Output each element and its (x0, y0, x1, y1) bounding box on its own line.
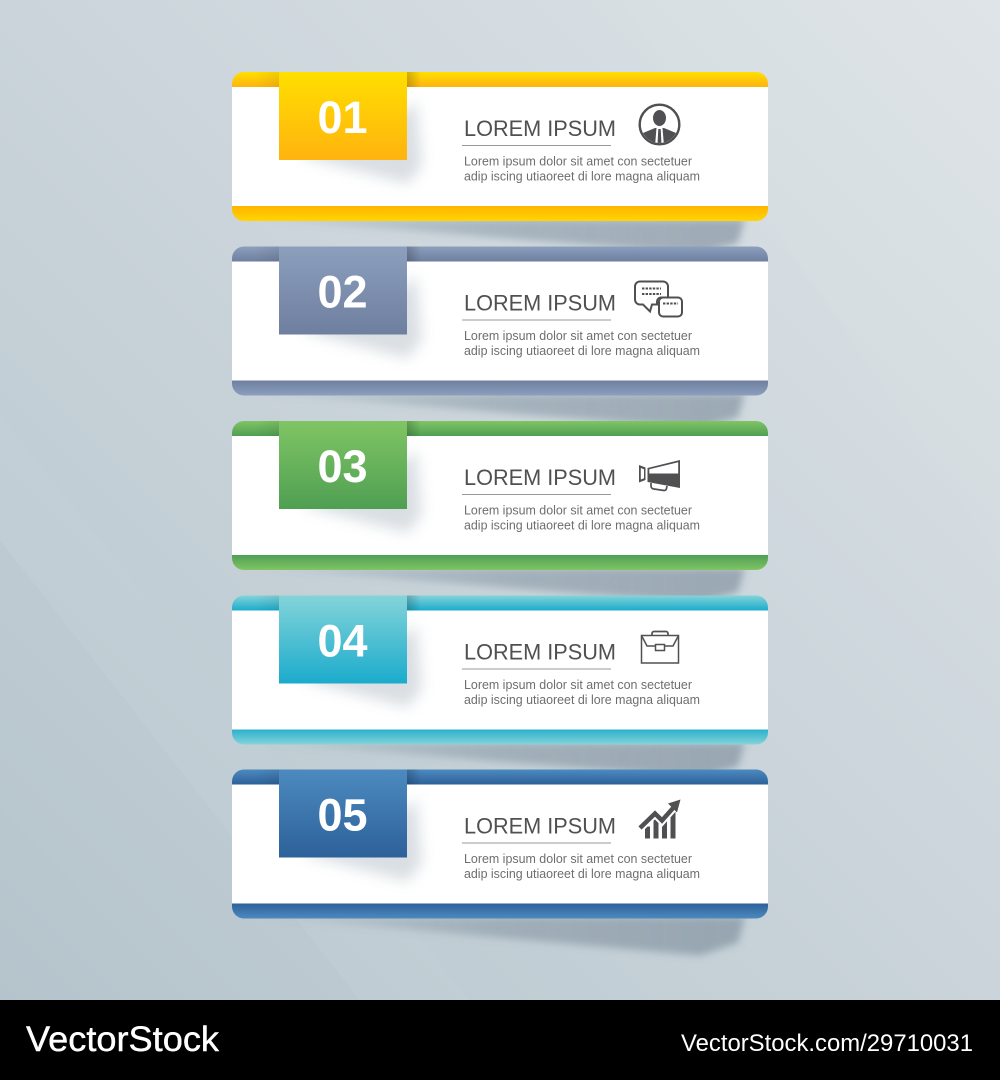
card 5 title: LOREM IPSUM (464, 814, 616, 838)
card 5 rule (462, 842, 611, 844)
card 4 top band (232, 596, 768, 610)
card 4 number tab (279, 596, 407, 684)
card 4 number: 04 (317, 616, 368, 666)
card 1 rule (462, 145, 611, 146)
card 4 body text (464, 678, 700, 707)
card 1 (232, 72, 768, 254)
card 2 body text: adip iscing utiaoreet di lore magna aliquam (464, 344, 700, 358)
card 3 top band (232, 421, 768, 436)
card 5 body text: adip iscing utiaoreet di lore magna aliquam (464, 867, 700, 881)
card 4 bottom band (232, 730, 768, 744)
card 2 number tab (279, 246, 407, 334)
footer url: VectorStock.com/29710031 (681, 1030, 973, 1057)
card 4 rule (462, 668, 611, 670)
card 1 top band (232, 72, 768, 87)
card 1 title: LOREM IPSUM (464, 116, 616, 141)
card 3 rule (462, 494, 611, 495)
card 5 drop shadow (262, 916, 745, 956)
icon: megaphone (639, 460, 680, 491)
card 2 bottom band (232, 380, 768, 396)
card 3 body text: adip iscing utiaoreet di lore magna aliquam (464, 518, 700, 532)
card 3 body text (464, 504, 700, 532)
card 3 title: LOREM IPSUM (464, 465, 616, 490)
icon: rising bar chart with arrow (640, 800, 680, 838)
card 2 top band (232, 246, 768, 262)
card 2 tab shadow (300, 274, 422, 358)
card 4 tab shadow (300, 624, 422, 708)
card 1 bottom band (232, 206, 768, 221)
card 5 number: 05 (317, 790, 368, 840)
card 3 white body (232, 436, 768, 555)
card 2 tab fold shade (255, 246, 421, 262)
card 2 drop shadow (262, 394, 745, 428)
card 5 tab fold shade (255, 770, 421, 784)
card 5 white body (232, 784, 768, 904)
card 3 (232, 421, 768, 603)
card 1 tab shadow (300, 100, 422, 184)
card 1 tab fold shade (255, 72, 421, 87)
card 1 white body (232, 87, 768, 206)
card 1 body text: adip iscing utiaoreet di lore magna aliquam (464, 170, 700, 184)
card 3 tab shadow (300, 449, 422, 533)
card 4 white body (232, 610, 768, 730)
footer bar (0, 1000, 1000, 1080)
card 1 number: 01 (317, 92, 368, 143)
card 2 white body (232, 262, 768, 380)
card 3 drop shadow (262, 568, 745, 603)
card 5 tab shadow (300, 798, 422, 882)
card 5 (232, 770, 768, 956)
card 4 title: LOREM IPSUM (464, 640, 616, 664)
footer logo: VectorStock (26, 1020, 220, 1059)
card 4 body text: adip iscing utiaoreet di lore magna aliquam (464, 693, 700, 707)
card 4 tab fold shade (255, 596, 421, 610)
card 2 body text: Lorem ipsum dolor sit amet con sectetuer (464, 329, 692, 343)
card 1 body text (464, 154, 700, 184)
card 4 (232, 596, 768, 778)
card 5 bottom band (232, 904, 768, 918)
icon: briefcase (642, 632, 678, 663)
card 1 body text: Lorem ipsum dolor sit amet con sectetuer (464, 154, 692, 168)
icon: speech bubbles (635, 282, 682, 316)
card 5 number tab (279, 770, 407, 858)
card 2 number: 02 (317, 266, 368, 318)
card 5 body text: Lorem ipsum dolor sit amet con sectetuer (464, 852, 692, 866)
card 5 body text (464, 852, 700, 881)
card 3 number: 03 (317, 441, 368, 492)
card 2 body text (464, 329, 700, 358)
card 3 body text: Lorem ipsum dolor sit amet con sectetuer (464, 504, 692, 518)
card 3 number tab (279, 421, 407, 509)
icon: businessman (640, 105, 679, 146)
card 4 drop shadow (262, 742, 745, 778)
card 2 title: LOREM IPSUM (464, 290, 616, 316)
card 1 drop shadow (262, 219, 745, 254)
card 2 rule (462, 320, 611, 321)
card 3 tab fold shade (255, 421, 421, 436)
card 5 top band (232, 770, 768, 784)
card 2 (232, 246, 768, 428)
card 1 number tab (279, 72, 407, 160)
card 3 bottom band (232, 555, 768, 570)
card 4 body text: Lorem ipsum dolor sit amet con sectetuer (464, 678, 692, 692)
